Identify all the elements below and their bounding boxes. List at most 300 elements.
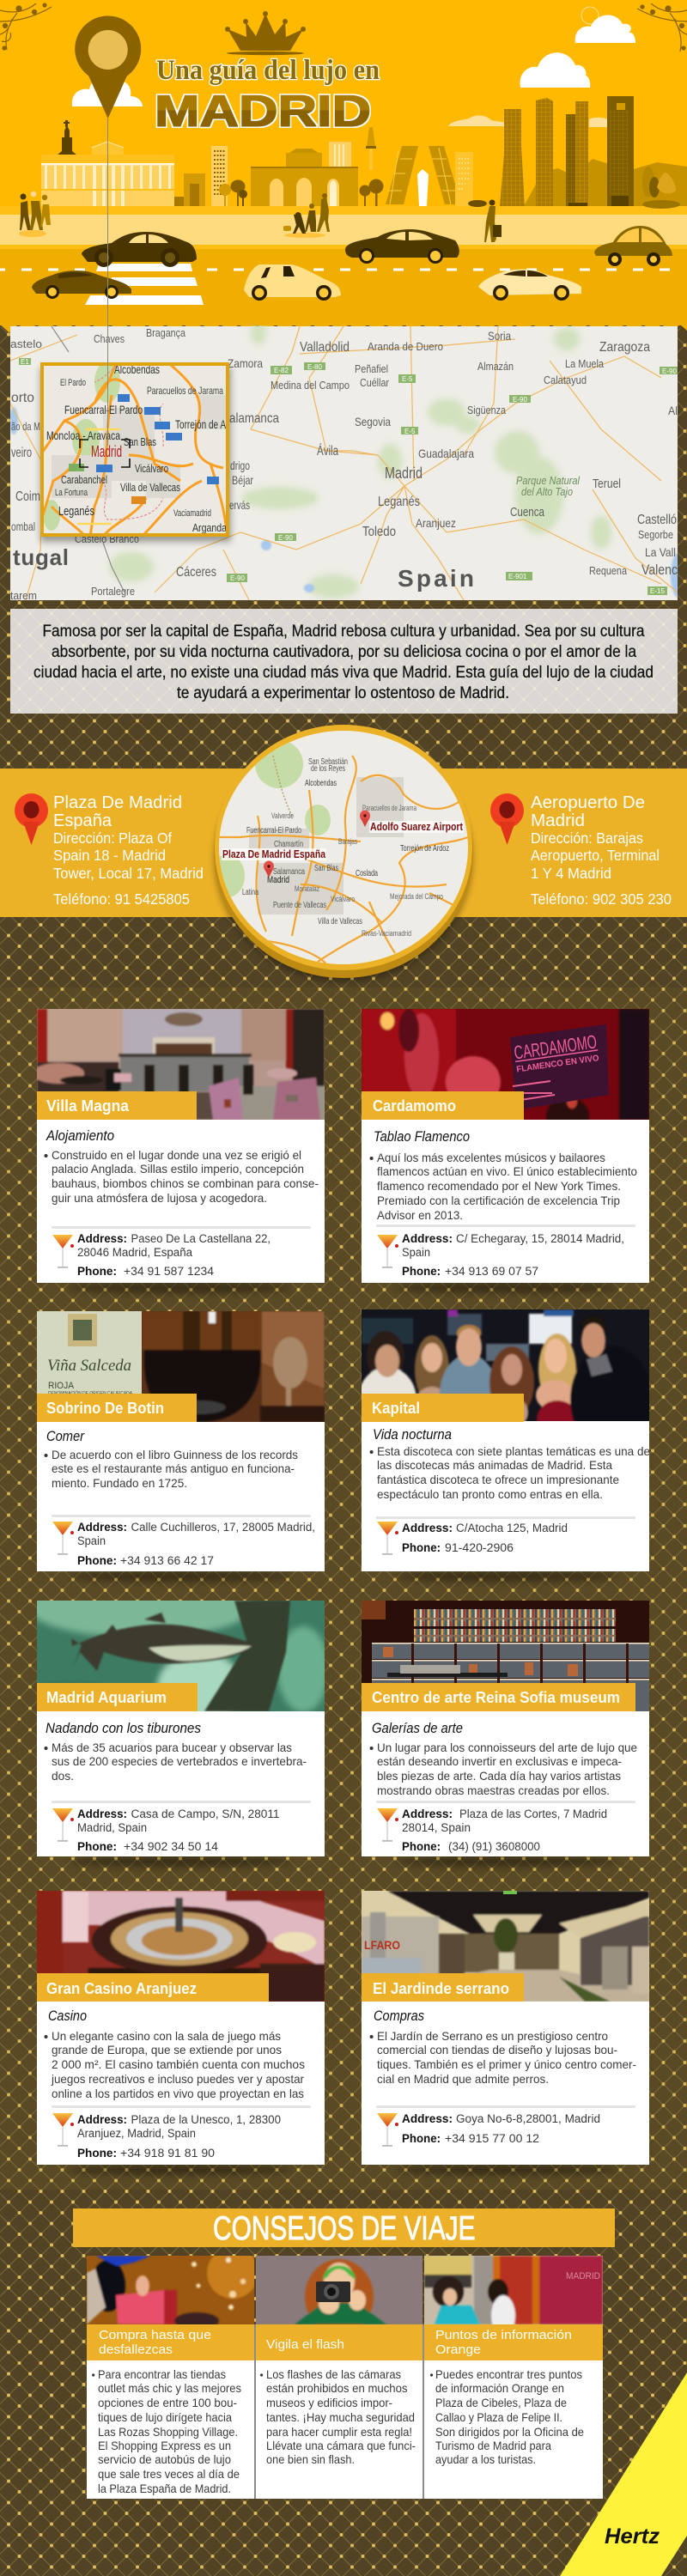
inset map of Madrid: Vaciamadrid [173, 508, 211, 519]
map labels: tugal [13, 544, 69, 570]
tip heading: Orange [435, 2343, 481, 2357]
skyline [41, 96, 687, 209]
photo: flamenco stage [362, 1009, 649, 1120]
description: palacio Anglada. Sillas estilo imperio, concepción [52, 1162, 304, 1176]
tip text: Callao y Plaza de Felipe II. [435, 2410, 562, 2424]
map labels: ervás [229, 498, 250, 512]
contact details: Address: [77, 1232, 127, 1245]
title bar: Kapital [372, 1400, 420, 1417]
circular map labels: Villa de Vallecas [318, 917, 362, 927]
tip heading: Vigila el flash [266, 2338, 344, 2352]
crosswalk [85, 264, 204, 305]
contact details: (34) (91) 3608000 [448, 1840, 540, 1853]
description [45, 1148, 319, 1205]
map terrain [109, 319, 611, 598]
circular map labels: Vicálvaro [331, 895, 355, 903]
location: Plaza de Madrid: España [53, 811, 112, 830]
map of Spain [9, 319, 686, 602]
contact details [402, 1232, 624, 1278]
map labels: ombal [11, 519, 35, 533]
description: fantástica discoteca te ofrece un impresionante [377, 1473, 619, 1486]
contact details: +34 902 34 50 14 [124, 1840, 219, 1853]
map labels: Almazán [477, 360, 514, 373]
description: dos. [52, 1769, 74, 1783]
icon: cocktail [377, 1522, 398, 1555]
zigzag edge [0, 325, 687, 334]
road dashes [0, 268, 670, 271]
tip text: outlet más chic y las mejores [98, 2381, 241, 2395]
pedestrians centre [283, 193, 330, 238]
map labels: veiro [11, 446, 32, 460]
tip heading [99, 2329, 211, 2357]
contact details: Plaza de la Unesco, 1, 28300 [131, 2113, 281, 2126]
label: Plaza De Madrid España: Plaza De Madrid España [222, 848, 326, 860]
contact details: Goya No-6-8,28001, Madrid [456, 2112, 600, 2125]
description: 2 000 m². El casino también cuenta con muchos [52, 2057, 305, 2071]
icon: cocktail [52, 1808, 74, 1842]
description: bauhaus, biombos chinos se combinan para conse- [52, 1176, 319, 1190]
title bar [362, 1683, 635, 1711]
tip text: tantes. ¡Hay mucha seguridad [266, 2410, 415, 2424]
panel: Reina Sofia [362, 1601, 649, 1867]
contact details: Phone: [402, 1541, 441, 1554]
location: Plaza de Madrid: Spain 18 - Madrid [53, 847, 166, 864]
contact details: Phone: [77, 1265, 117, 1278]
circular map labels: San Sebastián [308, 757, 348, 767]
Hertz logo: Hertz [605, 2524, 660, 2549]
photo: shopping gallery: LFARO [364, 1938, 400, 1952]
panel: travel tips table [87, 2247, 603, 2499]
category: Vida nocturna [373, 1427, 452, 1443]
bushes and trees right [468, 167, 680, 209]
title bar: Villa Magna [46, 1097, 130, 1115]
map of Spain: E-82 [274, 367, 289, 374]
tip text: Para encontrar las tiendas [98, 2367, 226, 2381]
circular map labels: Moratalaz [295, 884, 319, 893]
map labels: astelo [10, 337, 42, 350]
inset map of Madrid: Fuencarral-El Pardo [64, 403, 143, 416]
icon: location pin [75, 15, 141, 118]
description [370, 1741, 637, 1797]
KIO towers [386, 146, 461, 206]
woman with bag [484, 199, 502, 242]
title bar [37, 1683, 198, 1711]
car 2 brown [32, 270, 131, 299]
category: Tablao Flamenco [374, 1129, 470, 1145]
map of Spain: E-901 [508, 573, 527, 580]
trees [219, 180, 247, 206]
circular map labels: San Blas [314, 864, 338, 873]
map labels: Teruel [593, 477, 621, 491]
contact details: Address: [77, 2113, 127, 2126]
contact details: C/ Echegaray, 15, 28014 Madrid, [456, 1232, 624, 1245]
description [45, 2029, 305, 2100]
map of Spain: E-15 [650, 587, 665, 595]
panel: Madrid Aquarium [7, 1577, 329, 1867]
tip heading: Puntos de información [435, 2329, 572, 2342]
category: Alojamiento [46, 1128, 114, 1144]
map labels: Medina del Campo [271, 379, 350, 392]
circular map labels [242, 757, 449, 938]
description: Aquí los más excelentes músicos y bailaores [377, 1151, 605, 1164]
map labels: Portalegre [91, 585, 135, 598]
contact details: Address: [77, 1807, 127, 1820]
map labels: drigo [230, 459, 250, 472]
tip text: para hacer cumplir esta regla! [266, 2425, 412, 2439]
map labels: Ávila [317, 442, 338, 459]
contact details [402, 1807, 607, 1853]
title bar: Sobrino De Botin [46, 1400, 164, 1417]
title [155, 55, 380, 137]
category: Galerías de arte [372, 1721, 463, 1736]
circular map labels: Barajas [338, 837, 357, 846]
map labels: tarem [10, 589, 37, 602]
description: flamenco recomendado por el New York Times. [377, 1179, 621, 1193]
description: juegos recreativos e incluso puedes ver y apostar [51, 2072, 304, 2086]
description: miento. Fundado en 1725. [52, 1476, 187, 1490]
photo: wine: Viña Salceda [47, 1357, 131, 1375]
description: Construido en el lugar donde una vez se erigió el [52, 1148, 301, 1162]
description: están deseando invertir en exclusivas e impeca- [377, 1754, 622, 1768]
inset map of Madrid: Moncloa - Aravaca [46, 428, 120, 442]
photo: hotel bar [37, 1009, 325, 1120]
inset map of Madrid [40, 361, 231, 542]
contact details: Spain [77, 1534, 106, 1547]
contact details [77, 1232, 271, 1278]
car 6 beetle [594, 226, 672, 266]
inset map of Madrid: La Fortuna [55, 488, 88, 498]
contact details [402, 2112, 600, 2145]
panel: Cardamomo [362, 1009, 649, 1293]
category: Compras [374, 2008, 424, 2024]
map labels: Madrid [385, 465, 423, 482]
description: guir una atmósfera de lujosa y acogedora. [52, 1191, 267, 1205]
description: El Jardín de Serrano es un prestigioso centro [377, 2029, 608, 2043]
tip text: Llévate una cámara que funci- [266, 2439, 416, 2452]
description: espectáculo tan pronto como entras en ella. [377, 1487, 603, 1501]
map labels: Cáceres [176, 565, 216, 580]
map of Spain: E1 [21, 358, 29, 366]
title bar: Madrid Aquarium [46, 1689, 167, 1706]
contact details: Madrid, Spain [77, 1821, 147, 1834]
tip text: Las Rozas Shopping Village. [98, 2425, 238, 2439]
panel: El Jardin de Serrano [362, 1891, 649, 2175]
tip text: museos y edificios impor- [266, 2396, 392, 2409]
Puerta de Alcala [251, 142, 358, 206]
crown [225, 11, 306, 55]
tip text: Son dirigidos por la Oficina de [435, 2425, 584, 2439]
contact details: Paseo De La Castellana 22, [131, 1232, 271, 1245]
icon: cocktail [377, 1808, 398, 1842]
category: Nadando con los tiburones [46, 1721, 201, 1736]
inset map of Madrid: Arganda [192, 521, 228, 534]
photo: flamenco stage: CARDAMOMO [513, 1030, 598, 1064]
title bar [37, 1973, 269, 2002]
contact details: Phone: [77, 1554, 117, 1567]
panel: Villa Magna [33, 1009, 325, 1293]
tip: Vigila el flash [256, 2256, 423, 2466]
map labels: alamanca [229, 411, 279, 426]
inset map of Madrid: Leganés [58, 504, 94, 519]
circular map labels: Paracuellos de Jarama [362, 804, 416, 812]
location: Plaza de Madrid: Teléfono: 91 5425805 [53, 890, 190, 908]
contact details: +34 913 66 42 17 [120, 1554, 214, 1567]
description: Esta discoteca con siete plantas temáticas es una de [377, 1444, 650, 1458]
circular map labels: Rivas-Vaciamadrid [362, 929, 411, 938]
icon: cocktail [52, 2113, 74, 2147]
map of Spain: E-5 [402, 375, 413, 383]
title bar [362, 1091, 524, 1120]
inset map of Madrid: Alcobendas [114, 362, 160, 376]
location: Aeropuerto de Madrid: Dirección: Barajas [531, 829, 643, 847]
description: flamencos actúan en vivo. El único establecimiento [377, 1164, 637, 1178]
car 4 dark [345, 229, 459, 264]
circular map labels: Valverde [271, 811, 294, 820]
map labels: Aranda de Duero [368, 340, 443, 353]
map shields [19, 358, 678, 595]
title: Una guía del lujo en [156, 55, 380, 86]
map labels: Guadalajara [418, 447, 474, 460]
tip text: El Shopping Express es un [98, 2439, 231, 2452]
map of Spain: E-90 [513, 396, 527, 404]
panel: Kapital [358, 1309, 653, 1582]
heading: travel tips: CONSEJOS DE VIAJE [213, 2210, 476, 2247]
inset map of Madrid: Paracuellos de Jarama [147, 385, 223, 397]
corner flourish left [0, 3, 52, 50]
location: Aeropuerto de Madrid: Aeropuerto, Terminal [531, 847, 660, 864]
contact details: +34 913 69 07 57 [445, 1265, 538, 1278]
photo: wine: DENOMINACIÓN DE ORIGEN CALIFICADA [48, 1390, 133, 1396]
inset map of Madrid: Madrid [91, 443, 122, 460]
map labels: Aranjuez [416, 516, 456, 530]
icon: cocktail [52, 1235, 74, 1268]
clouds [72, 7, 635, 127]
inset map of Madrid: Carabanchel [61, 473, 107, 486]
inset shields [96, 394, 219, 484]
description: Un lugar para los connoisseurs del arte de lujo que [377, 1741, 637, 1754]
contact details: Phone: [402, 2132, 441, 2145]
intro text panel: Famosa por ser la capital de España, Madrid rebosa cultura y urbanidad. Sea por su cultura [43, 623, 645, 641]
photo: roulette [37, 1891, 325, 2002]
location: Aeropuerto de Madrid: Madrid [531, 811, 585, 830]
circular map [210, 725, 473, 981]
map labels: Valenc [641, 562, 678, 578]
map labels: Zamora [228, 356, 263, 370]
contact details: C/Atocha 125, Madrid [456, 1522, 568, 1534]
map labels: La Muela [565, 357, 605, 370]
circular map labels: Alcobendas [305, 779, 337, 788]
title bar [362, 1394, 524, 1422]
tip text: Plaza de Cibeles, Plaza de [435, 2396, 567, 2409]
circular map labels: Puente de Vallecas [273, 901, 326, 910]
pedestrians left [19, 191, 51, 237]
small monument [174, 173, 205, 206]
contact details: Phone: [77, 1840, 117, 1853]
circular map roads [219, 756, 468, 964]
header illustration [0, 0, 687, 334]
pin line [107, 118, 108, 446]
contact details: Address: [77, 1521, 127, 1534]
contact details: Plaza de las Cortes, 7 Madrid [459, 1807, 607, 1820]
circular map labels: Salamanca [273, 867, 305, 877]
title bar [37, 1091, 197, 1120]
tip: Puntos de informacion Orange [424, 2256, 603, 2466]
contact details: +34 915 77 00 12 [445, 2132, 539, 2145]
map of Spain: E-90 [278, 534, 293, 542]
map labels: Castelo Branco [75, 532, 139, 545]
contact details [77, 1807, 280, 1853]
map of Spain: E-5 [404, 428, 416, 435]
title bar: Cardamomo [373, 1097, 456, 1115]
tip text: Puedes encontrar tres puntos [435, 2367, 582, 2381]
locations band [0, 769, 687, 917]
car 3 pale [244, 264, 341, 301]
location: Plaza de Madrid [15, 793, 204, 908]
description: Más de 35 acuarios para bucear y observar las [52, 1741, 292, 1754]
description: cial en Madrid que admite perros. [377, 2072, 549, 2086]
tip text: tiques de lujo dirígete hacia [98, 2410, 232, 2424]
tower [211, 146, 228, 206]
description [370, 2029, 636, 2086]
contact details: Address: [402, 2112, 453, 2125]
skyscrapers [500, 96, 634, 206]
inset map of Madrid: Villa de Vallecas [120, 481, 180, 494]
circular map labels: Chamartín [274, 840, 303, 849]
tip heading [435, 2329, 572, 2357]
map labels: Toledo [362, 525, 396, 539]
block [455, 152, 473, 206]
contact details: Phone: [402, 1265, 441, 1278]
contact details: Phone: [77, 2147, 117, 2160]
tip text: ayudar a los turistas. [435, 2452, 536, 2466]
tip text: que sale tres veces al día de [98, 2467, 240, 2481]
car 1 dark [82, 232, 197, 267]
tip text: Los flashes de las cámaras [266, 2367, 401, 2381]
title bar: El Jardinde serrano [373, 1980, 509, 1997]
description: Premiado con la certificación de excelencia Trip [377, 1194, 620, 1207]
circular map labels: de los Reyes [311, 764, 345, 774]
tip heading: Compra hasta que [99, 2329, 211, 2342]
corner flourish right [637, 3, 687, 52]
map labels: Castelló [637, 513, 677, 527]
photo: museum bookshop [362, 1601, 649, 1711]
description: las discotecas más animadas de Madrid. Esta [377, 1458, 612, 1472]
photo: tourists [424, 2256, 603, 2324]
title bar [362, 1973, 524, 2002]
contact details: Address: [402, 1807, 453, 1820]
map of Spain: E-90 [662, 368, 677, 375]
location: Aeropuerto de Madrid [490, 793, 672, 908]
description: online a los partidos en vivo que proyectan en las [52, 2087, 304, 2100]
location: Plaza de Madrid: Tower, Local 17, Madrid [53, 865, 204, 882]
circular map labels: Coslada [356, 869, 378, 878]
description [370, 1444, 650, 1501]
palace [41, 120, 174, 206]
description: este es el restaurante más antiguo en funciona- [52, 1461, 295, 1475]
photo: nightclub group [362, 1309, 649, 1421]
tip text: la Plaza España de Madrid. [98, 2482, 231, 2495]
location: Plaza de Madrid: Plaza De Madrid [53, 793, 182, 812]
circular map labels: Torrejón de Ardoz [400, 844, 449, 854]
map roads [10, 326, 678, 600]
map labels: Calatayud [544, 374, 587, 386]
contact details: Phone: [402, 1840, 441, 1853]
tip text [92, 2367, 241, 2495]
location: Aeropuerto de Madrid: 1 Y 4 Madrid [531, 865, 611, 882]
location: Aeropuerto de Madrid: Aeropuerto De [531, 793, 645, 812]
map labels: Bragança [146, 326, 186, 339]
category: Casino [48, 2008, 87, 2024]
location: Aeropuerto de Madrid: Teléfono: 902 305 230 [531, 890, 672, 908]
tip: Compra hasta que desfallezcas [87, 2247, 258, 2495]
photo: wine [37, 1311, 325, 1422]
icon: red pin left [15, 793, 48, 845]
map labels: Cuenca [510, 505, 545, 519]
map labels: Béjar [232, 473, 253, 487]
icon: cocktail [377, 1235, 398, 1268]
map labels: orto [11, 391, 34, 405]
car 5 pale [478, 270, 581, 301]
Hertz yellow stripe [560, 2372, 687, 2576]
map labels: Requena [589, 564, 628, 577]
panel: Sobrino De Botin [37, 1311, 325, 1582]
contact details: Casa de Campo, S/N, 28011 [131, 1807, 280, 1820]
contact details [77, 1521, 315, 1567]
map labels: Segovia [355, 415, 391, 428]
category: Comer [46, 1429, 85, 1444]
icon: cocktail [377, 2113, 398, 2147]
icon: map pins [264, 811, 370, 878]
contact details [77, 2113, 281, 2160]
trees 2 [359, 179, 383, 206]
heading: travel tips [73, 2208, 615, 2247]
contact details: 28046 Madrid, España [77, 1246, 192, 1259]
map labels: Valladolid [300, 340, 350, 355]
icon: red pin right [490, 793, 524, 845]
intro text panel [10, 609, 678, 714]
description: comercial con tiendas de diseño y lujosas bou- [377, 2043, 617, 2057]
contact details: Aranjuez, Madrid, Spain [77, 2127, 196, 2140]
contact details [402, 1522, 568, 1554]
map labels: Soria [488, 329, 511, 343]
photo: tourists: MADRID [566, 2271, 600, 2281]
tip heading: desfallezcas [99, 2343, 173, 2357]
map labels: Zaragoza [599, 340, 650, 355]
description: sus de 200 especies de vertebrados e invertebra- [52, 1754, 307, 1768]
tip text: de información Orange en [435, 2381, 564, 2395]
map labels: Leganés [378, 495, 420, 509]
title bar: Centro de arte Reina Sofia museum [372, 1689, 620, 1706]
description [45, 1741, 307, 1783]
label: Adolfo Suarez Airport: Adolfo Suarez Airport [370, 820, 464, 833]
map labels: Sigüenza [467, 404, 507, 416]
map of Spain: E-90 [230, 574, 245, 582]
title bar [37, 1394, 197, 1422]
tip text: Turismo de Madrid para [435, 2439, 551, 2452]
circular map labels: Latina [242, 888, 258, 897]
description: mostrando obras maestras creadas por ellos. [377, 1783, 610, 1797]
description [45, 1448, 298, 1490]
tip text: one bien sin flash. [266, 2452, 355, 2466]
photo: woman with camera [256, 2256, 423, 2324]
map labels: Segorbe [638, 528, 673, 541]
inset map of Madrid: Vicálvaro [135, 462, 168, 475]
description: Un elegante casino con la sala de juego más [52, 2029, 281, 2043]
inset map of Madrid: Torrejón de A [175, 417, 226, 431]
map labels: La Vall [645, 545, 676, 559]
inset roads [40, 362, 228, 537]
map labels: Coim [15, 489, 40, 504]
